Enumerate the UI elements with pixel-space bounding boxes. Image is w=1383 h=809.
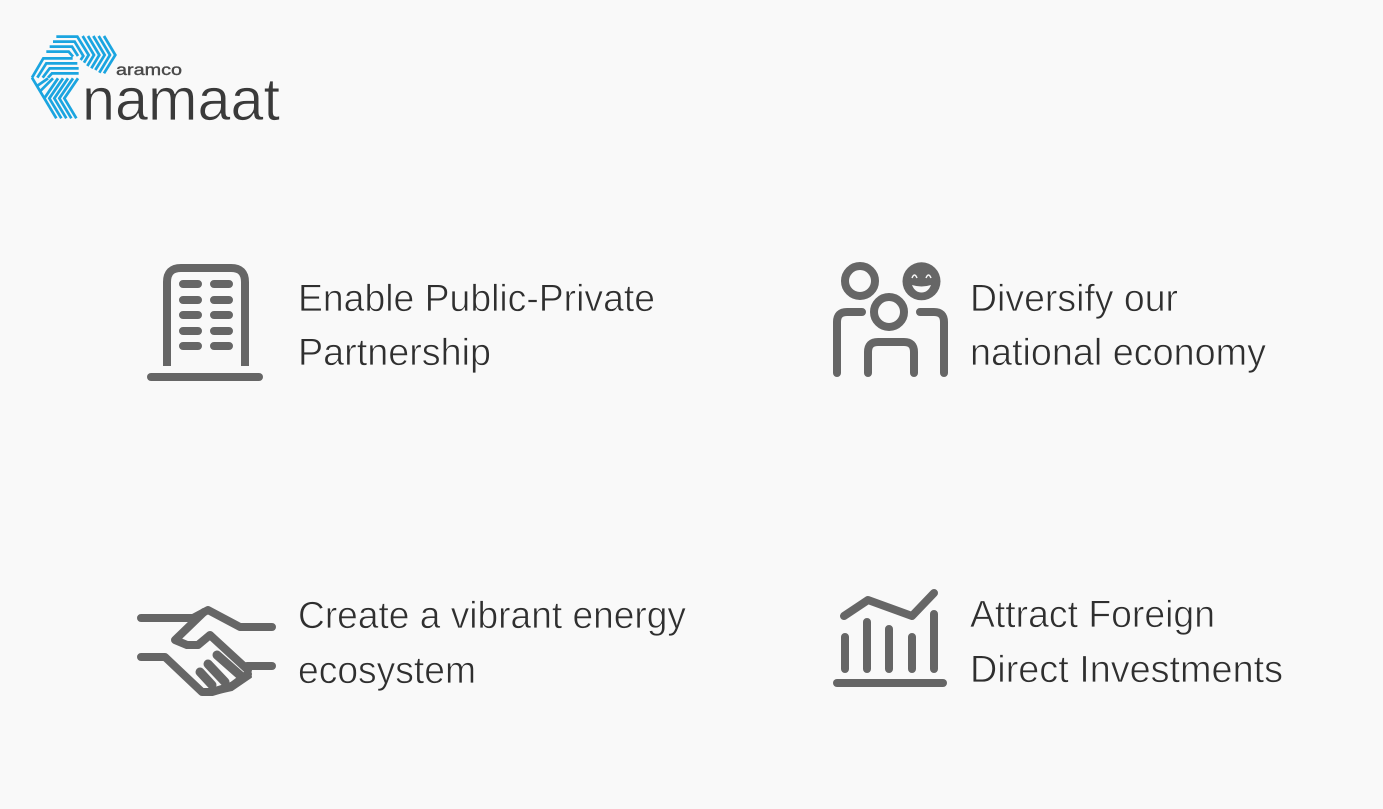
logo wordmark: aramco: aramco — [116, 62, 182, 79]
item: foreign investments — [837, 593, 1283, 691]
text: Diversify our national economy — [970, 278, 1266, 374]
item: energy ecosystem — [141, 595, 686, 694]
text: Attract Foreign Direct Investments: Direct Investments — [970, 649, 1283, 691]
item: public-private partnership — [151, 268, 655, 377]
text: Enable Public-Private Partnership: Enable Public-Private — [298, 278, 655, 320]
logo wordmark: namaat: namaat — [82, 66, 280, 133]
icon: handshake — [141, 610, 272, 694]
text: Attract Foreign Direct Investments: Attract Foreign — [970, 594, 1215, 636]
icon: people group — [837, 262, 944, 373]
text: Create a vibrant energy ecosystem: ecosystem — [298, 650, 476, 692]
logo: aramco namaat — [32, 36, 280, 133]
text: Enable Public-Private Partnership: Partnership — [298, 332, 491, 374]
logo mark: blue striped hexagon — [32, 36, 115, 118]
text: Diversify our national economy: national economy — [970, 332, 1266, 374]
text: Diversify our national economy: Diversify our — [970, 278, 1178, 320]
text: Attract Foreign Direct Investments — [970, 594, 1283, 691]
text: Enable Public-Private Partnership — [298, 278, 655, 374]
text: Create a vibrant energy ecosystem: Create a vibrant energy — [298, 595, 686, 637]
text: Create a vibrant energy ecosystem — [298, 595, 686, 692]
icon: bar and line chart — [837, 593, 943, 683]
icon: building — [151, 268, 259, 377]
item: diversify economy — [837, 262, 1266, 374]
